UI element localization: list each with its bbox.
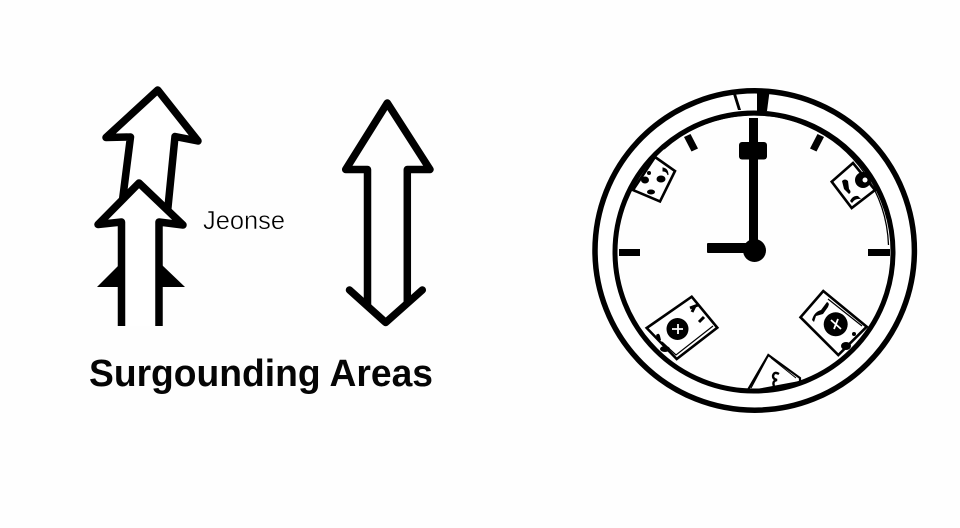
arrow: up head and shaft xyxy=(346,103,430,305)
banknote: lower left xyxy=(647,297,717,359)
icon: stacked rising arrows xyxy=(97,90,198,326)
clock inner ring xyxy=(615,113,893,391)
clock hands xyxy=(707,118,767,262)
icon: clock with banknotes xyxy=(595,91,914,410)
clock top marker xyxy=(733,92,770,111)
banknote: upper left xyxy=(633,157,675,202)
banknote: lower right xyxy=(800,291,867,355)
label: Jeonse: Jeonse xyxy=(203,205,285,235)
banknote: bottom xyxy=(747,355,800,392)
arrow: lower front arrow xyxy=(98,183,183,326)
icon: double-headed arrow xyxy=(346,103,430,322)
arrow: upper tilted arrow xyxy=(106,90,198,212)
arrow: down chevron xyxy=(350,290,422,322)
icon: lower arrow fins xyxy=(97,265,185,287)
clock outer ring xyxy=(595,91,914,410)
hour ticks xyxy=(619,134,890,256)
banknote: upper right xyxy=(832,163,875,208)
clock inner highlight arc xyxy=(664,115,888,245)
title: Surgounding Areas: Surgounding Areas xyxy=(89,353,433,395)
clock bezel band xyxy=(604,100,905,402)
